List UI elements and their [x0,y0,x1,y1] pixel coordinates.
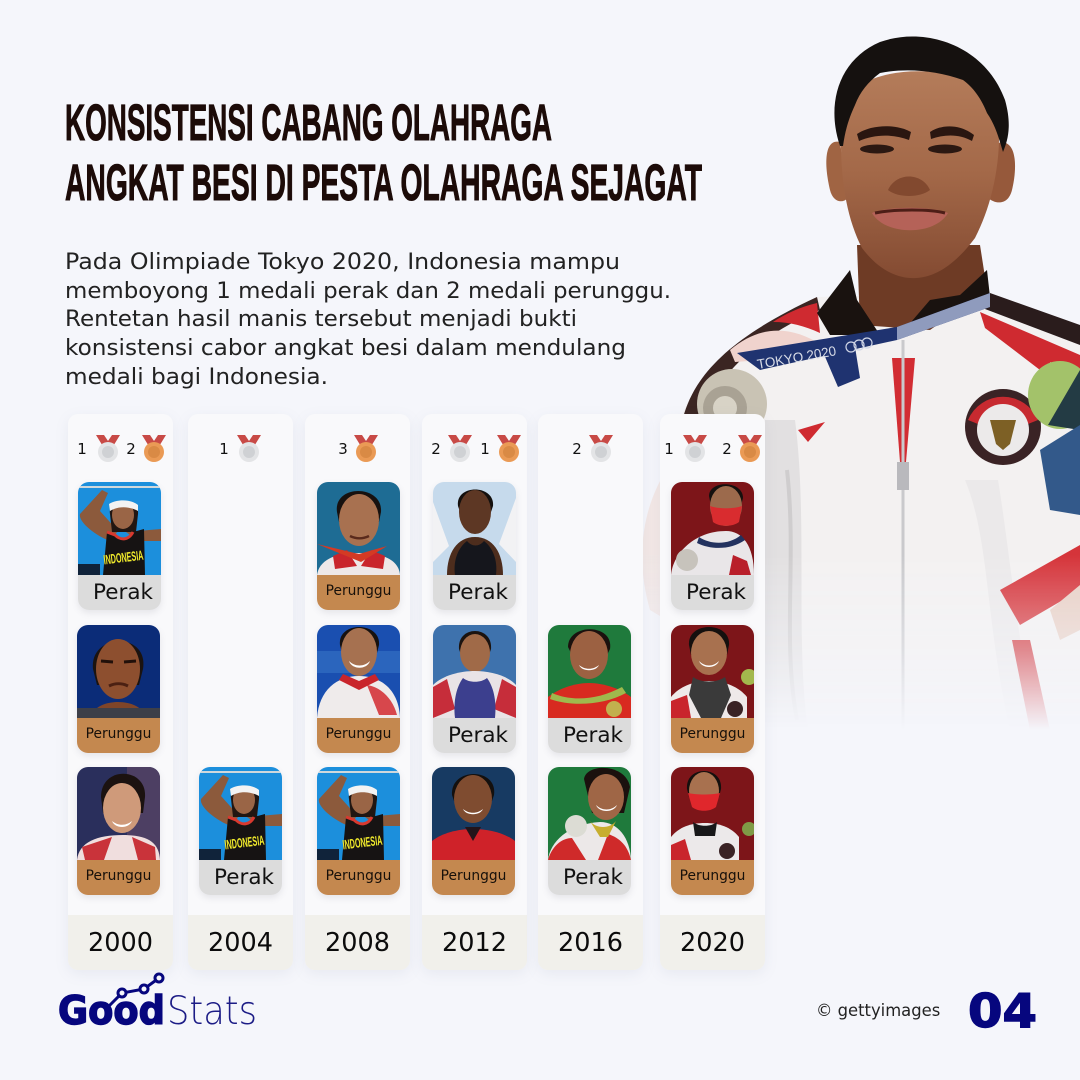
athlete card: 2012 perak [433,482,516,610]
medal tally 2000: 2 [126,440,136,458]
athlete card: 2020 perak [671,482,754,610]
medal label: Perak [448,723,508,748]
medal tally 2008 [338,435,378,462]
medal label [77,718,160,753]
medal tally 2016: 2 [572,440,582,458]
nose [888,176,930,196]
collar [817,270,880,335]
medal tally 2008: 3 [338,440,348,458]
athlete card: 2020 perunggu two [671,767,754,895]
medal label: Perak [448,580,508,605]
athlete card: 2000 perunggu two [77,767,160,895]
medal label: Perunggu [86,726,151,742]
medal tally 2020: 2 [722,440,732,458]
athlete card: 2016 perak two [548,767,631,895]
year label: 2008 [325,928,390,958]
athlete card: 2012 perak two [433,625,516,753]
column: 2016 [538,414,643,970]
medal label [433,575,516,610]
athlete card: 2004 perak [199,767,282,895]
medal label [548,860,631,895]
athlete card: 2000 perak [78,482,161,610]
ears [826,142,848,201]
year label [188,915,293,970]
medal label [317,860,400,895]
medal tally 2020: 1 [664,440,674,458]
medal label [199,860,282,895]
medal label [433,718,516,753]
intro paragraph: Rentetan hasil manis tersebut menjadi bukti [65,307,577,332]
column: 2012 [422,414,527,970]
medal label [432,860,515,895]
ghost arm [643,482,660,616]
year label [305,915,410,970]
medal label [671,718,754,753]
year label: 2012 [442,928,507,958]
medal tally 2012 [431,435,521,462]
athlete card: 2008 perunggu three [317,767,400,895]
medal tally 2020 [664,435,762,462]
athlete card: 2012 perunggu [432,767,515,895]
year label: 2016 [558,928,623,958]
mouth [872,208,948,230]
medal tally 2000 [77,435,166,462]
medal label [548,718,631,753]
medal label [671,860,754,895]
column: 2020 [660,414,765,970]
athlete card: 2000 perunggu one [77,625,160,753]
logo: GoodStats: Good [58,989,165,1034]
flowers and box [1028,361,1080,429]
medal label: Perunggu [326,868,391,884]
medal label: Perunggu [326,583,391,599]
year label: 2020 [680,928,745,958]
hero photo: Eko Yuli Irawan with Tokyo 2020 medal [643,36,1080,724]
athlete card: 2008 perunggu one [317,482,400,610]
medal label: Perak [93,580,153,605]
team emblem [965,389,1041,465]
medal label [671,575,754,610]
medal label: Perunggu [680,726,745,742]
intro paragraph: konsistensi cabor angkat besi dalam mendulang [65,336,626,361]
medal tally 2004: 1 [219,440,229,458]
year label: 2000 [88,928,153,958]
medal tally 2000: 1 [77,440,87,458]
photo credit: © gettyimages [816,1001,940,1020]
intro paragraph: medali bagi Indonesia. [65,365,328,390]
title: KONSISTENSI CABANG OLAHRAGA [65,94,552,151]
intro paragraph: Pada Olimpiade Tokyo 2020, Indonesia mampu [65,250,620,275]
medal tally 2012: 1 [480,440,490,458]
medal label [77,860,160,895]
year label [422,915,527,970]
medal label: Perak [563,865,623,890]
medal label: Perak [214,865,274,890]
medal label: Perunggu [86,868,151,884]
brows and eyes [857,126,911,141]
logo: GoodStats: Stats [167,989,257,1034]
column: 2004 [188,414,293,970]
medal tally 2016 [572,435,613,462]
year label [538,915,643,970]
medal label: Perunggu [680,868,745,884]
column: 2000 [68,414,173,970]
year label [68,915,173,970]
neck [857,245,987,330]
medal label [317,575,400,610]
athlete card: 2020 perunggu one [671,625,754,753]
face [841,71,999,278]
medal label: Perak [686,580,746,605]
year label: 2004 [208,928,273,958]
hair [834,37,1009,152]
athlete card: 2016 perak one [548,625,631,753]
column: 2008 [305,414,410,970]
medal [697,369,767,419]
hero photo: Eko Yuli Irawan with Tokyo 2020 medal: TOKYO 2020 [756,343,837,372]
medal label: Perak [563,723,623,748]
medal label [78,575,161,610]
medal tally 2012: 2 [431,440,441,458]
intro paragraph: memboyong 1 medali perak dan 2 medali perunggu. [65,279,671,304]
medal tally 2004 [219,435,261,462]
medal label: Perunggu [441,868,506,884]
athlete card: 2008 perunggu two [317,625,400,753]
medal label: Perunggu [326,726,391,742]
year label [660,915,765,970]
lanyard [737,293,990,370]
jacket [683,296,1080,580]
medal label [317,718,400,753]
